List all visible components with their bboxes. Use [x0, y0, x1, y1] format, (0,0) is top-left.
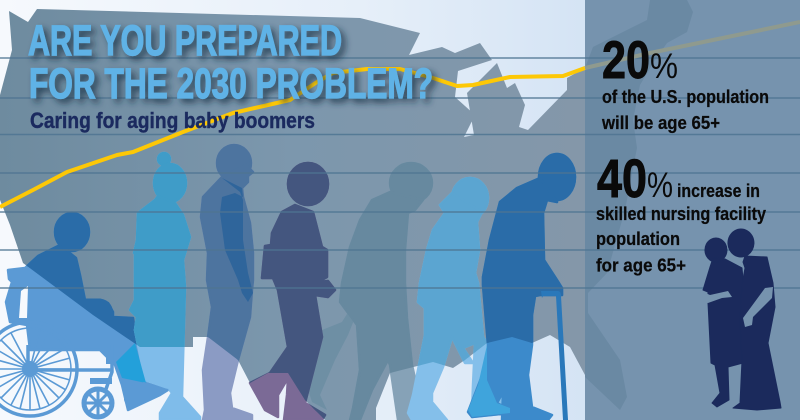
horizontal grid lines	[0, 58, 800, 288]
wheelchair shoe	[124, 382, 169, 410]
right statistics panel	[585, 0, 800, 420]
statistic: 20 percent: %	[650, 47, 678, 86]
shoe overlap highlight	[468, 345, 510, 417]
walking cane	[541, 291, 568, 420]
figure: person in wheelchair	[0, 213, 168, 417]
statistic: 40 percent: for age 65+	[596, 256, 686, 276]
wheelchair wheel and frame	[0, 300, 112, 417]
male caregiver	[728, 229, 781, 410]
statistic: 40 percent: increase in	[677, 181, 760, 201]
statistic: 40 percent	[596, 149, 766, 276]
map continuation on panel	[585, 0, 693, 410]
figure: man with cane	[468, 154, 575, 420]
statistic: 40 percent: %	[647, 166, 673, 205]
caregiver arm	[743, 287, 773, 327]
man's arm	[220, 178, 253, 302]
overlap of wheelchair leg and woman	[116, 343, 146, 383]
statistic: 20 percent: of the U.S. population	[602, 87, 769, 107]
yellow trend line	[0, 68, 585, 207]
icon: caregiver couple	[703, 229, 781, 410]
title: ARE YOU PREPARED	[28, 17, 342, 65]
statistic: 20 percent	[601, 31, 769, 133]
figure: standing man	[201, 145, 253, 420]
statistic: 40 percent: skilled nursing facility	[596, 204, 766, 224]
title	[28, 17, 433, 108]
suitcase silhouette	[305, 306, 358, 410]
title: FOR THE 2030 PROBLEM?	[29, 60, 433, 108]
map of the United States	[0, 9, 585, 420]
figure: elderly woman stooping	[408, 178, 510, 420]
statistic: 40 percent: 40	[597, 149, 647, 209]
subtitle: Caring for aging baby boomers	[30, 108, 315, 133]
statistic: 20 percent: will be age 65+	[601, 113, 720, 133]
trend line on panel	[585, 22, 800, 68]
statistic: 20 percent: 20	[602, 31, 650, 90]
gap between chair back and body	[19, 286, 28, 318]
patient arm	[703, 291, 732, 303]
figure: woman with handbag	[250, 163, 335, 420]
figure: woman with hair bun	[130, 153, 200, 420]
statistic: 40 percent: population	[596, 229, 680, 249]
woman patient	[703, 238, 745, 407]
figure: grey man walking	[340, 163, 432, 420]
